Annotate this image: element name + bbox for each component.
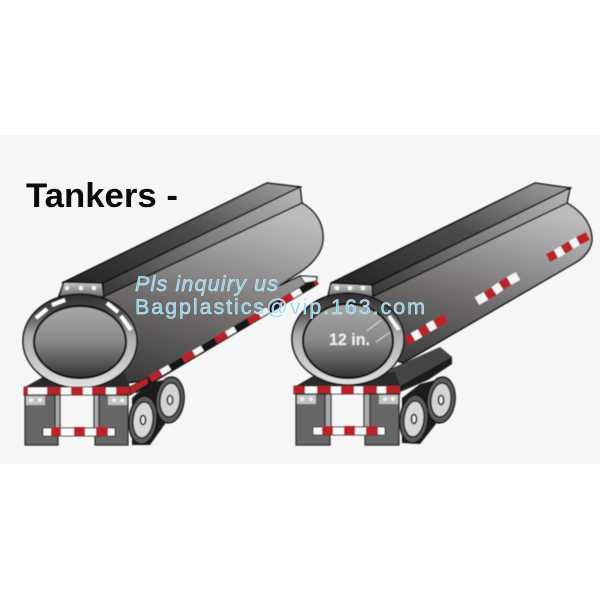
right tanker body (348, 203, 592, 363)
background band (0, 135, 600, 464)
right tanker 12 in label: 12 in. (329, 330, 370, 349)
left tanker bumper (24, 377, 148, 395)
left tanker rear platform (25, 373, 130, 387)
watermark line 1: Pls inquiry us (135, 272, 278, 296)
right underride bar (313, 426, 385, 435)
left tanker side reflective strip (134, 276, 317, 390)
left tanker wheels (127, 376, 186, 445)
left tanker body (80, 203, 323, 385)
left tanker top box (59, 183, 302, 297)
right tanker wheels (398, 376, 457, 444)
right tanker underframe (400, 347, 452, 392)
right tanker end cap (292, 293, 404, 385)
left tanker end cap (23, 294, 137, 388)
right tanker bumper (294, 386, 400, 394)
left underride bar (43, 427, 115, 436)
right tanker (292, 183, 592, 445)
right rear frame and mudflaps (296, 394, 399, 445)
left rear frame and mudflaps (25, 395, 128, 445)
left tanker (23, 183, 323, 445)
watermark (135, 272, 425, 319)
right tanker 12 in label (329, 320, 390, 349)
right tanker rear platform (296, 372, 400, 386)
watermark line 2: Bagplastics@vip.163.com (135, 295, 425, 319)
title: Tankers - (26, 177, 178, 215)
right tanker reflective strips (407, 236, 588, 341)
right tanker top box (328, 183, 570, 297)
